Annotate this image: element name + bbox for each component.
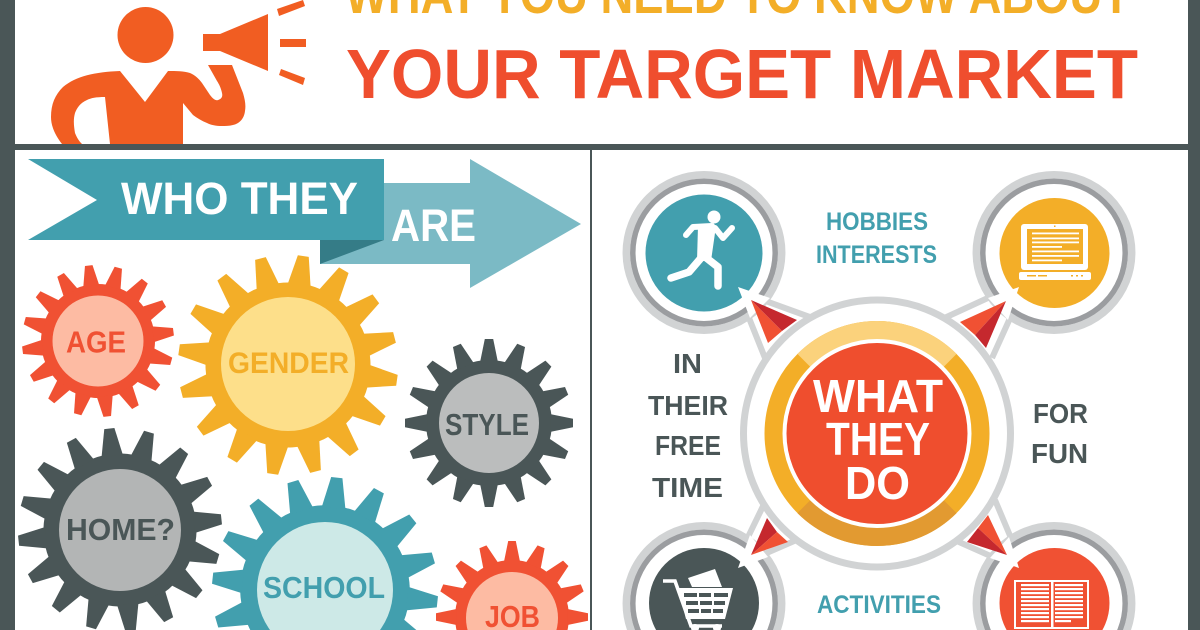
hub text: THEY: [826, 413, 930, 465]
label: for fun: FOR: [1033, 398, 1088, 429]
pointer notches: [738, 287, 1019, 568]
label: for fun: [1031, 398, 1088, 469]
ribbon fold: [320, 240, 384, 264]
icon: shopping cart: [663, 569, 733, 630]
node: cart: [626, 526, 782, 630]
connector lines: [747, 297, 1011, 558]
central hub: what they do: [744, 300, 1010, 567]
gear: style: [405, 339, 573, 507]
node: laptop: [976, 175, 1132, 330]
ribbon: who they: [28, 159, 384, 240]
label: for fun: FUN: [1031, 438, 1088, 469]
gear: job: [436, 541, 588, 630]
gold ring shadow: [804, 506, 950, 536]
hub text: [813, 370, 943, 509]
arrow: bottom left: [751, 518, 788, 555]
heading text: are: ARE: [391, 200, 476, 251]
arrow: are: [320, 159, 581, 288]
gear: age: [13, 256, 183, 426]
label: in their free time: TIME: [652, 472, 723, 503]
arrow: bottom right: [967, 515, 1007, 555]
hub text: DO: [845, 457, 910, 509]
heading text: who they: WHO THEY: [121, 173, 358, 224]
gear: gender: [164, 241, 412, 489]
gear: home: HOME?: [66, 512, 175, 547]
gear: style: STYLE: [445, 407, 529, 442]
label: in their free time: THEIR: [648, 390, 728, 421]
label: hobbies interests: HOBBIES: [826, 208, 928, 236]
gear: school: SCHOOL: [263, 570, 385, 605]
label: hobbies interests: INTERESTS: [816, 241, 937, 269]
label: activities: ACTIVITIES: [817, 591, 941, 619]
title line 2: YOUR TARGET MARKET: [346, 35, 1138, 113]
icon: runner: [671, 210, 732, 286]
label: in their free time: FREE: [655, 430, 721, 461]
gear: home: [8, 418, 232, 630]
label: hobbies interests: [816, 208, 937, 269]
gold ring highlight: [804, 331, 950, 361]
icon: open book: [1015, 581, 1088, 628]
icon: person with megaphone: [51, 0, 306, 144]
node: book: [976, 526, 1132, 630]
label: in their free time: IN: [673, 348, 702, 379]
node: hobbies (runner): [626, 175, 782, 330]
hub text: WHAT: [813, 370, 943, 422]
gear: school: [201, 466, 449, 630]
arrow: top right: [960, 301, 1006, 348]
label: in their free time: [648, 348, 728, 503]
arrow: top left: [751, 300, 797, 343]
panel: who they are heading: [28, 159, 581, 288]
gear: gender: GENDER: [228, 347, 349, 380]
gear: age: AGE: [66, 324, 126, 360]
icon: laptop: [1019, 224, 1091, 280]
